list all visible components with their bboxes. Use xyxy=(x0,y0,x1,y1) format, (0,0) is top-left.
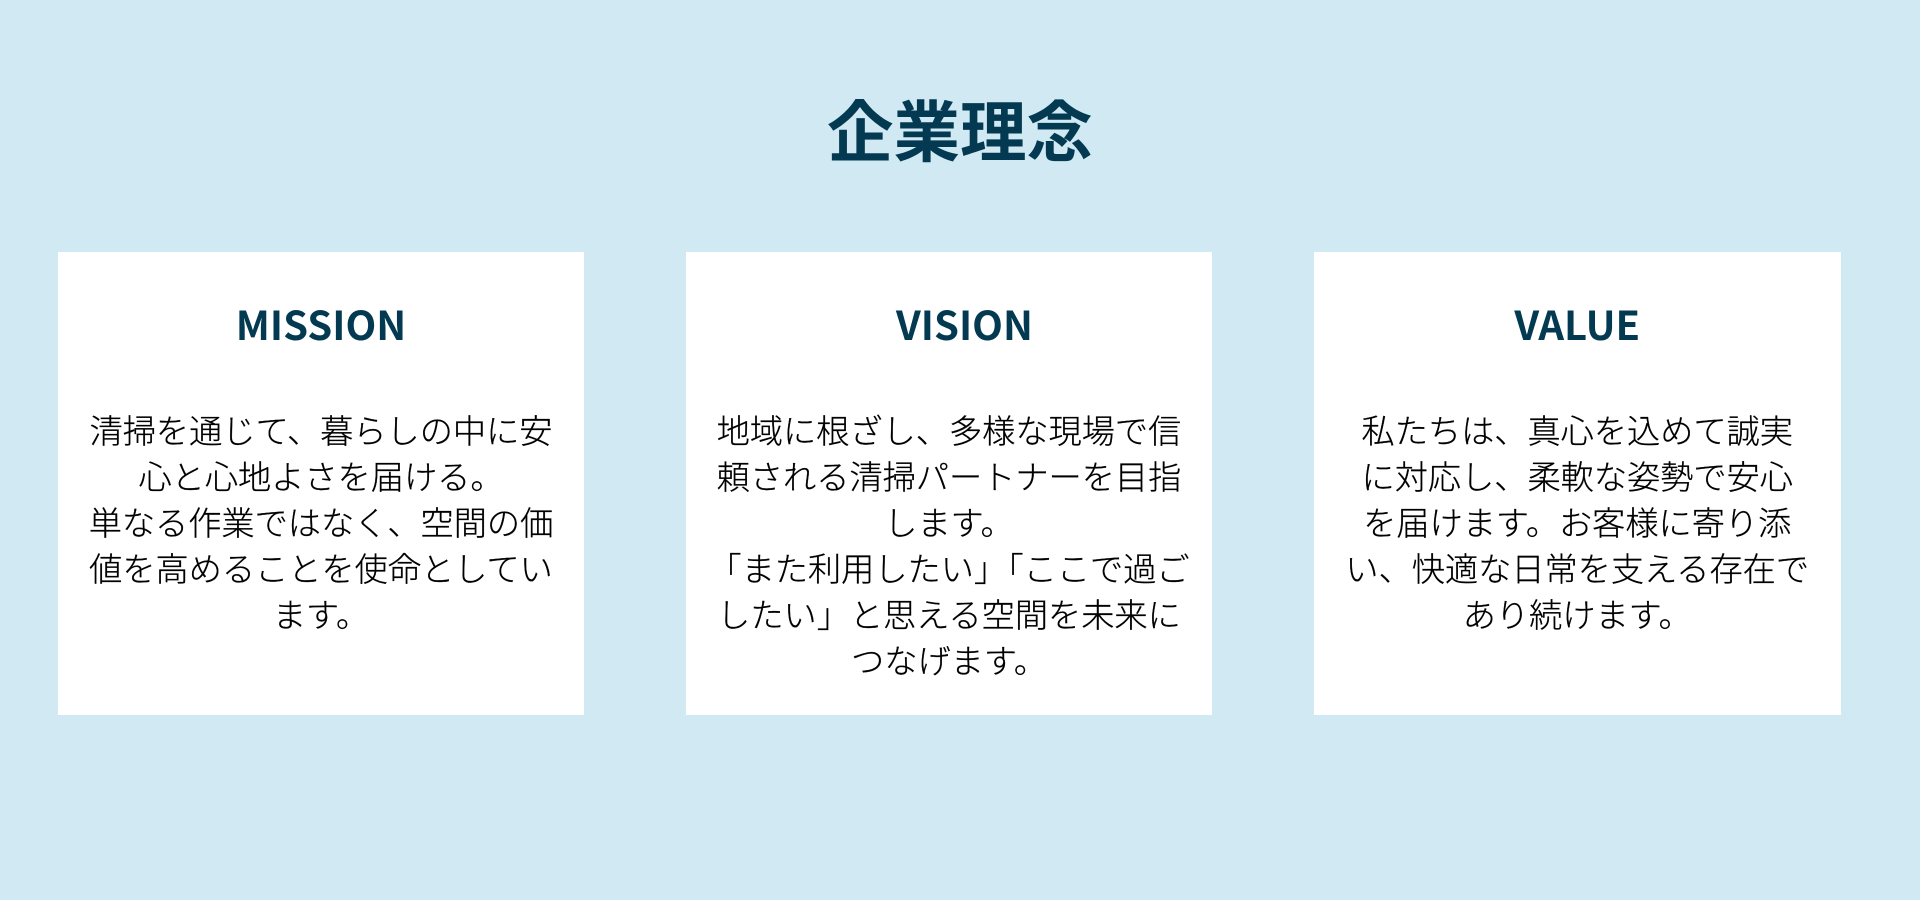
title: 企業理念 xyxy=(827,80,1093,176)
mission text: 単なる作業ではなく、空間の価 xyxy=(89,496,553,545)
mission text: 値を高めることを使命としてい xyxy=(89,542,553,591)
vision text: 頼される清掃パートナーを目指 xyxy=(717,450,1181,499)
value text: あり続けます。 xyxy=(1463,588,1692,637)
value text xyxy=(1345,404,1809,637)
mission text: ます。 xyxy=(273,588,369,637)
vision text: 地域に根ざし、多様な現場で信 xyxy=(717,404,1181,453)
value text: を届けます。お客様に寄り添 xyxy=(1363,496,1791,545)
panel: value xyxy=(1314,252,1840,715)
mission text: 清掃を通じて、暮らしの中に安 xyxy=(90,404,552,453)
vision text xyxy=(708,404,1190,683)
panel: mission xyxy=(58,252,584,715)
vision text: したい」と思える空間を未来に xyxy=(717,588,1181,637)
value text: い、快適な日常を支える存在で xyxy=(1345,542,1809,591)
mission text xyxy=(89,404,553,637)
vision heading: VISION xyxy=(896,294,1033,352)
vision text: 「また利用したい」「ここで過ご xyxy=(708,542,1190,591)
value text: 私たちは、真心を込めて誠実 xyxy=(1362,404,1793,453)
value text: に対応し、柔軟な姿勢で安心 xyxy=(1362,450,1793,499)
mission text: 心と心地よさを届ける。 xyxy=(138,450,504,499)
vision text: つなげます。 xyxy=(851,634,1047,683)
vision text: します。 xyxy=(884,496,1014,545)
mission heading: MISSION xyxy=(236,294,406,352)
value heading: VALUE xyxy=(1514,294,1640,352)
panel: vision xyxy=(686,252,1212,715)
